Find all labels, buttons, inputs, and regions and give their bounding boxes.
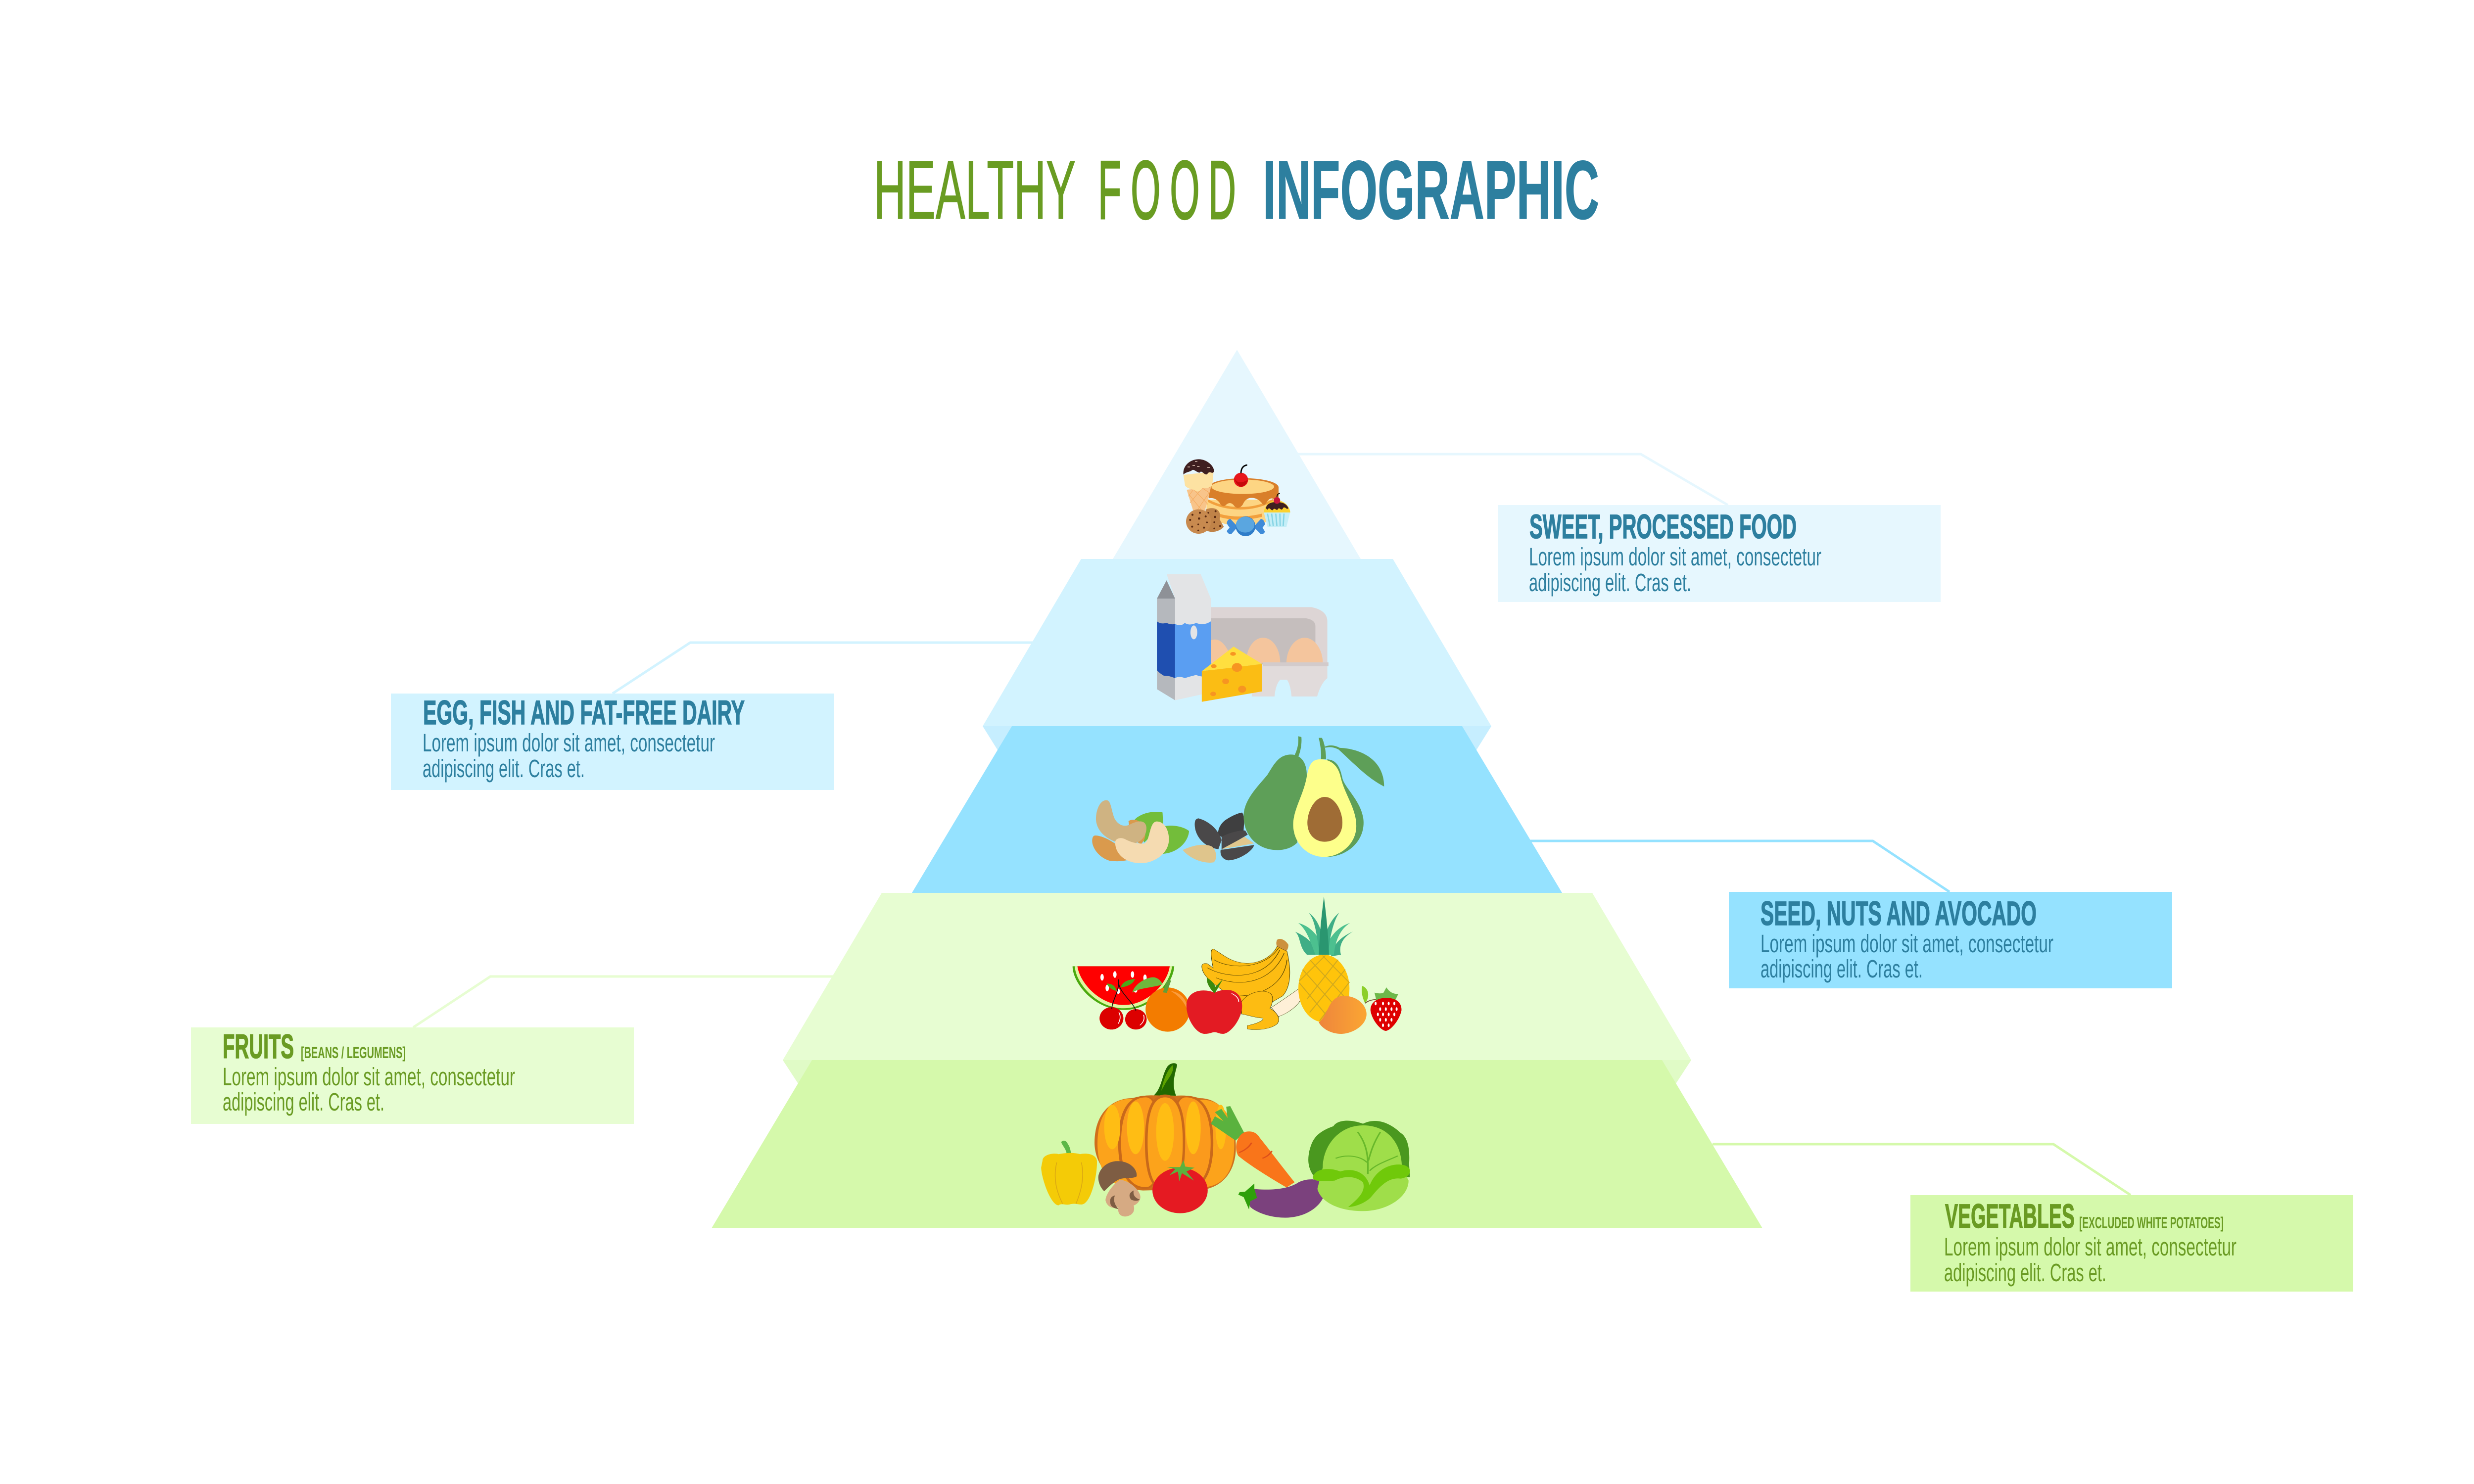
tier: dairy [983, 559, 1491, 726]
text: sweet body [1529, 543, 1821, 597]
icon: pineapple [1295, 896, 1353, 1022]
icon: candy [1227, 516, 1265, 536]
heading: vegetables: [EXCLUDED WHITE POTATOES] [2079, 1214, 2224, 1232]
tier: fruits [783, 893, 1691, 1060]
panel: seed, nuts and avocado [1729, 892, 2172, 988]
icon group: fruits [1073, 896, 1401, 1034]
text: egg body: Lorem ipsum dolor sit amet, consectetur [423, 729, 715, 757]
icon: mango [1319, 996, 1367, 1034]
text: fruits body: Lorem ipsum dolor sit amet, consectetur [223, 1063, 515, 1091]
icon: cheese [1202, 647, 1262, 702]
icon: cake [1206, 465, 1279, 525]
leader line: seed [1530, 841, 1950, 892]
tier: nuts [912, 726, 1562, 893]
text: seed body: adipiscing elit. Cras et. [1760, 955, 1923, 983]
heading: sweet: SWEET, PROCESSED FOOD [1529, 508, 1797, 546]
title: FOOD [1098, 143, 1236, 236]
text: vegetables body [1944, 1233, 2236, 1287]
icon: ice cream [1184, 459, 1214, 511]
icon: egg carton [1211, 607, 1329, 696]
text: seed body [1760, 929, 2053, 983]
tier: dairy fold [983, 726, 1491, 750]
icon group: nuts and avocado [1092, 736, 1384, 863]
text: sweet body: adipiscing elit. Cras et. [1529, 568, 1691, 597]
leader line: sweet [1296, 454, 1728, 505]
icon group: dairy [1157, 574, 1329, 702]
leader line: fruits [413, 976, 836, 1027]
icon: bananas [1202, 939, 1305, 1029]
icon: cherries [1099, 979, 1146, 1029]
text: egg body [423, 729, 715, 783]
heading: fruits [223, 1027, 406, 1066]
pyramid [712, 350, 1762, 1228]
icon: seeds [1183, 813, 1254, 863]
heading: fruits: [BEANS / LEGUMENS] [301, 1044, 406, 1062]
leader line: egg [613, 643, 1039, 694]
heading: egg: EGG, FISH AND FAT-FREE DAIRY [423, 694, 745, 732]
icon: strawberry [1362, 986, 1401, 1031]
icon: apple [1187, 978, 1242, 1034]
heading: fruits: FRUITS [223, 1027, 294, 1066]
text: vegetables body: adipiscing elit. Cras et. [1944, 1258, 2106, 1287]
icon: pumpkin [1094, 1063, 1236, 1191]
text: egg body: adipiscing elit. Cras et. [423, 754, 585, 783]
title: HEALTHY [874, 143, 1076, 236]
text: vegetables body: Lorem ipsum dolor sit amet, consectetur [1944, 1233, 2236, 1261]
icon: tomato [1152, 1160, 1208, 1213]
text: seed body: Lorem ipsum dolor sit amet, consectetur [1760, 929, 2053, 958]
icon: eggplant [1238, 1179, 1325, 1218]
icon group: vegetables [1041, 1063, 1410, 1218]
tier: vegetables [712, 1060, 1762, 1228]
tier: fruits fold [783, 1060, 1691, 1083]
text: sweet body: Lorem ipsum dolor sit amet, consectetur [1529, 543, 1821, 571]
icon: orange [1132, 977, 1190, 1032]
icon: cookies [1186, 508, 1224, 534]
text: fruits body [223, 1063, 515, 1116]
title: INFOGRAPHIC [1263, 143, 1599, 236]
icon: cabbage [1308, 1120, 1410, 1211]
icon: watermelon [1073, 966, 1174, 1010]
text: fruits body: adipiscing elit. Cras et. [223, 1088, 384, 1116]
icon: carrot [1211, 1106, 1294, 1188]
icon: cupcake [1264, 493, 1290, 527]
heading: seed: SEED, NUTS AND AVOCADO [1760, 894, 2037, 932]
icon: nuts [1092, 800, 1189, 863]
icon: mushroom [1098, 1161, 1141, 1216]
panel: vegetables [1910, 1195, 2353, 1292]
tier: sweets [1113, 350, 1361, 559]
panel: sweet, processed food [1498, 505, 1941, 602]
heading: vegetables: VEGETABLES [1945, 1197, 2075, 1235]
icon: yellow pepper [1041, 1141, 1097, 1206]
panel: fruits [191, 1027, 634, 1124]
title [874, 143, 1599, 236]
panel: egg, fish and fat-free dairy [391, 694, 834, 790]
leader line: vegetables [1713, 1144, 2131, 1195]
icon: milk carton [1157, 574, 1211, 700]
icon: avocado [1243, 736, 1384, 857]
icon group: sweets [1184, 459, 1290, 536]
